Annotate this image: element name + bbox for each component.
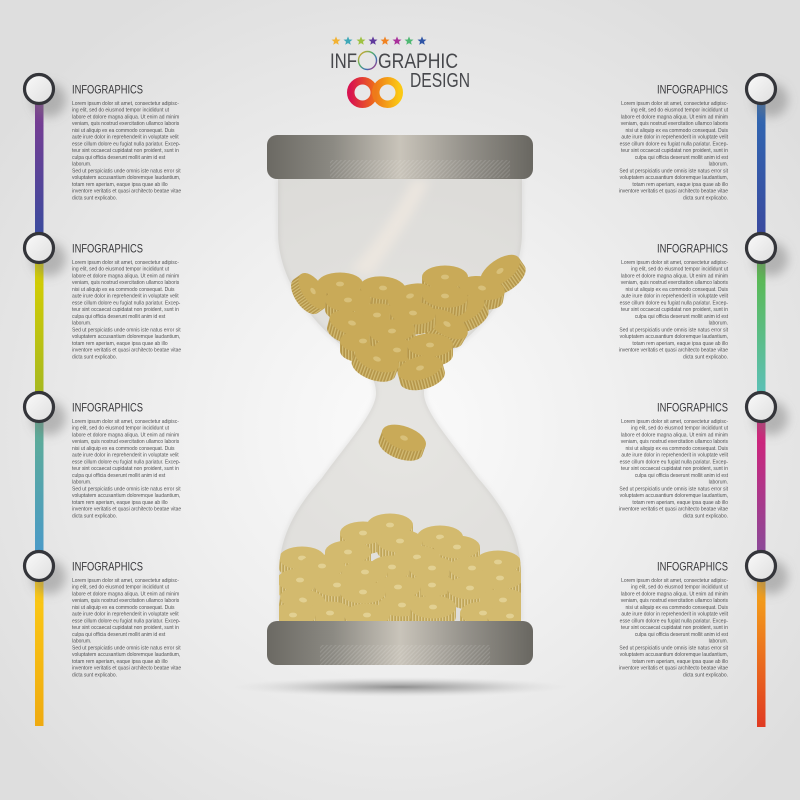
node: left 4 [24, 552, 66, 594]
body text: culpa qui officia deserunt mollit anim id est [635, 473, 728, 479]
body text: ing elit, sed do eiusmod tempor incididunt ut [631, 107, 728, 114]
body text: aute irure dolor in reprehenderit in voluptate velit [621, 611, 728, 618]
body text: nisi ut aliquip ex ea commodo consequat. Duis [72, 446, 175, 452]
node: right 3 [746, 392, 788, 435]
body text: Sed ut perspiciatis unde omnis iste natus error sit [619, 327, 728, 334]
heading: INFOGRAPHICS [657, 560, 728, 574]
body text: esse cillum dolore eu fugiat nulla pariatur. Excep- [72, 459, 181, 466]
body text: nisi ut aliquip ex ea commodo consequat. Duis [72, 287, 175, 293]
coins: upper bulb [285, 248, 531, 395]
logo stars [332, 36, 426, 45]
body text: Lorem ipsum dolor sit amet, consectetur adipisc- [72, 260, 179, 266]
body text: labore et dolore magna aliqua. Ut enim ad minim [72, 432, 180, 439]
body text: aute irure dolor in reprehenderit in voluptate velit [72, 293, 179, 300]
body text: aute irure dolor in reprehenderit in voluptate velit [72, 452, 179, 459]
logo word end: GRAPHIC [378, 50, 458, 73]
body text: voluptatem accusantium doloremque laudantium, [620, 493, 728, 499]
body text: esse cillum dolore eu fugiat nulla pariatur. Excep- [72, 141, 181, 148]
bar 8 [757, 580, 766, 727]
body text: voluptatem accusantium doloremque laudantium, [620, 652, 728, 658]
body text: ing elit, sed do eiusmod tempor incididunt ut [631, 266, 728, 273]
heading: INFOGRAPHICS [72, 242, 143, 256]
body text: ing elit, sed do eiusmod tempor incididunt ut [631, 584, 728, 591]
body text: voluptatem accusantium doloremque laudantium, [620, 175, 728, 181]
body text: teur sint occaecat cupidatat non proident, sunt in [72, 148, 179, 154]
body text: ing elit, sed do eiusmod tempor incididunt ut [72, 425, 169, 432]
body text: nisi ut aliquip ex ea commodo consequat. Duis [625, 605, 728, 611]
body text: inventore veritatis et quasi architecto beatae vitae [619, 506, 728, 513]
body text: totam rem aperiam, eaque ipsa quae ab illo [72, 500, 168, 506]
body text: inventore veritatis et quasi architecto beatae vitae [619, 665, 728, 672]
body text: totam rem aperiam, eaque ipsa quae ab illo [632, 341, 728, 347]
body text: labore et dolore magna aliqua. Ut enim ad minim [621, 591, 728, 598]
body text: Sed ut perspiciatis unde omnis iste natus error sit [72, 327, 181, 334]
body text: veniam, quis nostrud exercitation ullamco laboris [72, 439, 179, 445]
body text: voluptatem accusantium doloremque laudantium, [620, 334, 728, 340]
body text: aute irure dolor in reprehenderit in voluptate velit [72, 134, 179, 141]
text block: left 4 [72, 560, 181, 679]
body text: totam rem aperiam, eaque ipsa quae ab illo [72, 659, 168, 665]
body text: Lorem ipsum dolor sit amet, consectetur adipisc- [621, 419, 728, 425]
body text: laborum. [709, 638, 728, 645]
body text: laborum. [72, 479, 91, 486]
body text: laborum. [72, 320, 91, 327]
body text: Lorem ipsum dolor sit amet, consectetur adipisc- [621, 101, 728, 107]
body text: esse cillum dolore eu fugiat nulla pariatur. Excep- [72, 300, 181, 307]
body text: veniam, quis nostrud exercitation ullamco laboris [621, 598, 728, 604]
body text: laborum. [709, 161, 728, 168]
node: left 2 [24, 234, 66, 276]
body text: teur sint occaecat cupidatat non proident, sunt in [621, 148, 728, 154]
node: right 1 [746, 74, 788, 117]
body text: inventore veritatis et quasi architecto beatae vitae [619, 188, 728, 195]
bottom cap [267, 621, 533, 665]
logo ring letter [358, 52, 376, 70]
body text: nisi ut aliquip ex ea commodo consequat. Duis [625, 287, 728, 293]
body text: culpa qui officia deserunt mollit anim id est [635, 314, 728, 320]
body text: totam rem aperiam, eaque ipsa quae ab illo [632, 182, 728, 188]
bar 3 [35, 421, 44, 553]
body text: nisi ut aliquip ex ea commodo consequat. Duis [72, 128, 175, 134]
node: right 2 [746, 234, 788, 276]
body text: nisi ut aliquip ex ea commodo consequat. Duis [625, 128, 728, 134]
body text: voluptatem accusantium doloremque laudantium, [72, 652, 181, 658]
node: left 1 [24, 74, 66, 117]
text block: left 1 [72, 82, 181, 202]
body text: Sed ut perspiciatis unde omnis iste natus error sit [619, 168, 728, 175]
body text: teur sint occaecat cupidatat non proident, sunt in [72, 466, 179, 472]
hourglass [265, 135, 536, 695]
heading: INFOGRAPHICS [657, 400, 728, 414]
body text: Sed ut perspiciatis unde omnis iste natus error sit [72, 645, 181, 652]
body text: labore et dolore magna aliqua. Ut enim ad minim [621, 432, 728, 439]
body text: laborum. [709, 320, 728, 327]
body text: totam rem aperiam, eaque ipsa quae ab illo [632, 500, 728, 506]
body text: veniam, quis nostrud exercitation ullamco laboris [72, 121, 179, 127]
heading: INFOGRAPHICS [72, 560, 143, 574]
heading: INFOGRAPHICS [657, 82, 728, 96]
body text: ing elit, sed do eiusmod tempor incididunt ut [72, 107, 169, 114]
logo: infographic design [330, 36, 470, 104]
body text: labore et dolore magna aliqua. Ut enim ad minim [72, 273, 180, 280]
body text: ing elit, sed do eiusmod tempor incididunt ut [72, 584, 169, 591]
body text: nisi ut aliquip ex ea commodo consequat. Duis [625, 446, 728, 452]
glass body [278, 179, 522, 621]
body text: teur sint occaecat cupidatat non proident, sunt in [621, 625, 728, 631]
body text: inventore veritatis et quasi architecto beatae vitae [72, 188, 181, 195]
body text: Lorem ipsum dolor sit amet, consectetur adipisc- [72, 419, 179, 425]
falling coin [375, 419, 430, 466]
body text: nisi ut aliquip ex ea commodo consequat. Duis [72, 605, 175, 611]
body text: inventore veritatis et quasi architecto beatae vitae [619, 347, 728, 354]
body text: Lorem ipsum dolor sit amet, consectetur adipisc- [72, 101, 179, 107]
bar 5 [757, 103, 766, 235]
bar 7 [757, 421, 766, 553]
body text: ing elit, sed do eiusmod tempor incididunt ut [72, 266, 169, 273]
node: right 4 [746, 552, 788, 594]
body text: labore et dolore magna aliqua. Ut enim ad minim [72, 114, 180, 121]
body text: esse cillum dolore eu fugiat nulla pariatur. Excep- [620, 141, 728, 148]
text block: right 3 [619, 400, 728, 520]
body text: totam rem aperiam, eaque ipsa quae ab illo [72, 182, 168, 188]
body text: esse cillum dolore eu fugiat nulla pariatur. Excep- [620, 459, 728, 466]
body text: Lorem ipsum dolor sit amet, consectetur adipisc- [621, 578, 728, 584]
body text: culpa qui officia deserunt mollit anim id est [72, 314, 166, 320]
heading: INFOGRAPHICS [72, 82, 143, 96]
body text: dicta sunt explicabo. [683, 672, 728, 679]
logo word start: INF [330, 50, 357, 73]
timeline: left bars [35, 103, 44, 726]
bar 4 [35, 580, 44, 726]
body text: laborum. [72, 638, 91, 645]
node: left 3 [24, 392, 66, 435]
body text: veniam, quis nostrud exercitation ullamco laboris [621, 439, 728, 445]
body text: culpa qui officia deserunt mollit anim id est [72, 632, 166, 638]
text block: left 3 [72, 400, 181, 520]
body text: culpa qui officia deserunt mollit anim id est [635, 632, 728, 638]
body text: veniam, quis nostrud exercitation ullamco laboris [72, 598, 179, 604]
body text: culpa qui officia deserunt mollit anim id est [72, 155, 166, 161]
body text: inventore veritatis et quasi architecto beatae vitae [72, 665, 181, 672]
body text: aute irure dolor in reprehenderit in voluptate velit [621, 134, 728, 141]
body text: dicta sunt explicabo. [72, 195, 117, 202]
body text: totam rem aperiam, eaque ipsa quae ab illo [72, 341, 168, 347]
body text: inventore veritatis et quasi architecto beatae vitae [72, 506, 181, 513]
body text: labore et dolore magna aliqua. Ut enim ad minim [621, 273, 728, 280]
body text: dicta sunt explicabo. [72, 513, 117, 520]
body text: laborum. [709, 479, 728, 486]
body text: labore et dolore magna aliqua. Ut enim ad minim [621, 114, 728, 121]
body text: ing elit, sed do eiusmod tempor incididunt ut [631, 425, 728, 432]
body text: dicta sunt explicabo. [683, 354, 728, 361]
coins: lower bulb [279, 514, 521, 621]
body text: culpa qui officia deserunt mollit anim id est [635, 155, 728, 161]
body text: esse cillum dolore eu fugiat nulla pariatur. Excep- [620, 618, 728, 625]
heading: INFOGRAPHICS [657, 242, 728, 256]
body text: veniam, quis nostrud exercitation ullamco laboris [72, 280, 179, 286]
body text: teur sint occaecat cupidatat non proident, sunt in [72, 625, 179, 631]
ground shadow [230, 677, 570, 697]
body text: Sed ut perspiciatis unde omnis iste natus error sit [619, 486, 728, 493]
text block: right 1 [619, 82, 728, 202]
bar 1 [35, 103, 44, 235]
logo infinity mark [351, 81, 399, 104]
bar 6 [757, 262, 766, 394]
body text: Sed ut perspiciatis unde omnis iste natus error sit [72, 486, 181, 493]
body text: voluptatem accusantium doloremque laudantium, [72, 493, 181, 499]
body text: Sed ut perspiciatis unde omnis iste natus error sit [619, 645, 728, 652]
body text: Sed ut perspiciatis unde omnis iste natus error sit [72, 168, 181, 175]
body text: dicta sunt explicabo. [683, 513, 728, 520]
body text: labore et dolore magna aliqua. Ut enim ad minim [72, 591, 180, 598]
body text: teur sint occaecat cupidatat non proident, sunt in [72, 307, 179, 313]
body text: teur sint occaecat cupidatat non proident, sunt in [621, 466, 728, 472]
body text: culpa qui officia deserunt mollit anim id est [72, 473, 166, 479]
body text: Lorem ipsum dolor sit amet, consectetur adipisc- [621, 260, 728, 266]
text block: right 2 [619, 242, 728, 361]
body text: aute irure dolor in reprehenderit in voluptate velit [72, 611, 179, 618]
body text: inventore veritatis et quasi architecto beatae vitae [72, 347, 181, 354]
timeline: right bars [757, 103, 766, 727]
body text: aute irure dolor in reprehenderit in voluptate velit [621, 452, 728, 459]
body text: veniam, quis nostrud exercitation ullamco laboris [621, 121, 728, 127]
text block: left 2 [72, 242, 181, 361]
body text: Lorem ipsum dolor sit amet, consectetur adipisc- [72, 578, 179, 584]
body text: veniam, quis nostrud exercitation ullamco laboris [621, 280, 728, 286]
body text: dicta sunt explicabo. [683, 195, 728, 202]
body text: dicta sunt explicabo. [72, 672, 117, 679]
heading: INFOGRAPHICS [72, 400, 143, 414]
body text: laborum. [72, 161, 91, 168]
body text: totam rem aperiam, eaque ipsa quae ab illo [632, 659, 728, 665]
bar 2 [35, 262, 44, 394]
body text: esse cillum dolore eu fugiat nulla pariatur. Excep- [620, 300, 728, 307]
body text: voluptatem accusantium doloremque laudantium, [72, 175, 181, 181]
body text: aute irure dolor in reprehenderit in voluptate velit [621, 293, 728, 300]
text block: right 4 [619, 560, 728, 679]
body text: teur sint occaecat cupidatat non proident, sunt in [621, 307, 728, 313]
top cap [267, 135, 533, 179]
body text: dicta sunt explicabo. [72, 354, 117, 361]
body text: esse cillum dolore eu fugiat nulla pariatur. Excep- [72, 618, 181, 625]
body text: voluptatem accusantium doloremque laudantium, [72, 334, 181, 340]
logo word design: DESIGN [410, 70, 470, 92]
